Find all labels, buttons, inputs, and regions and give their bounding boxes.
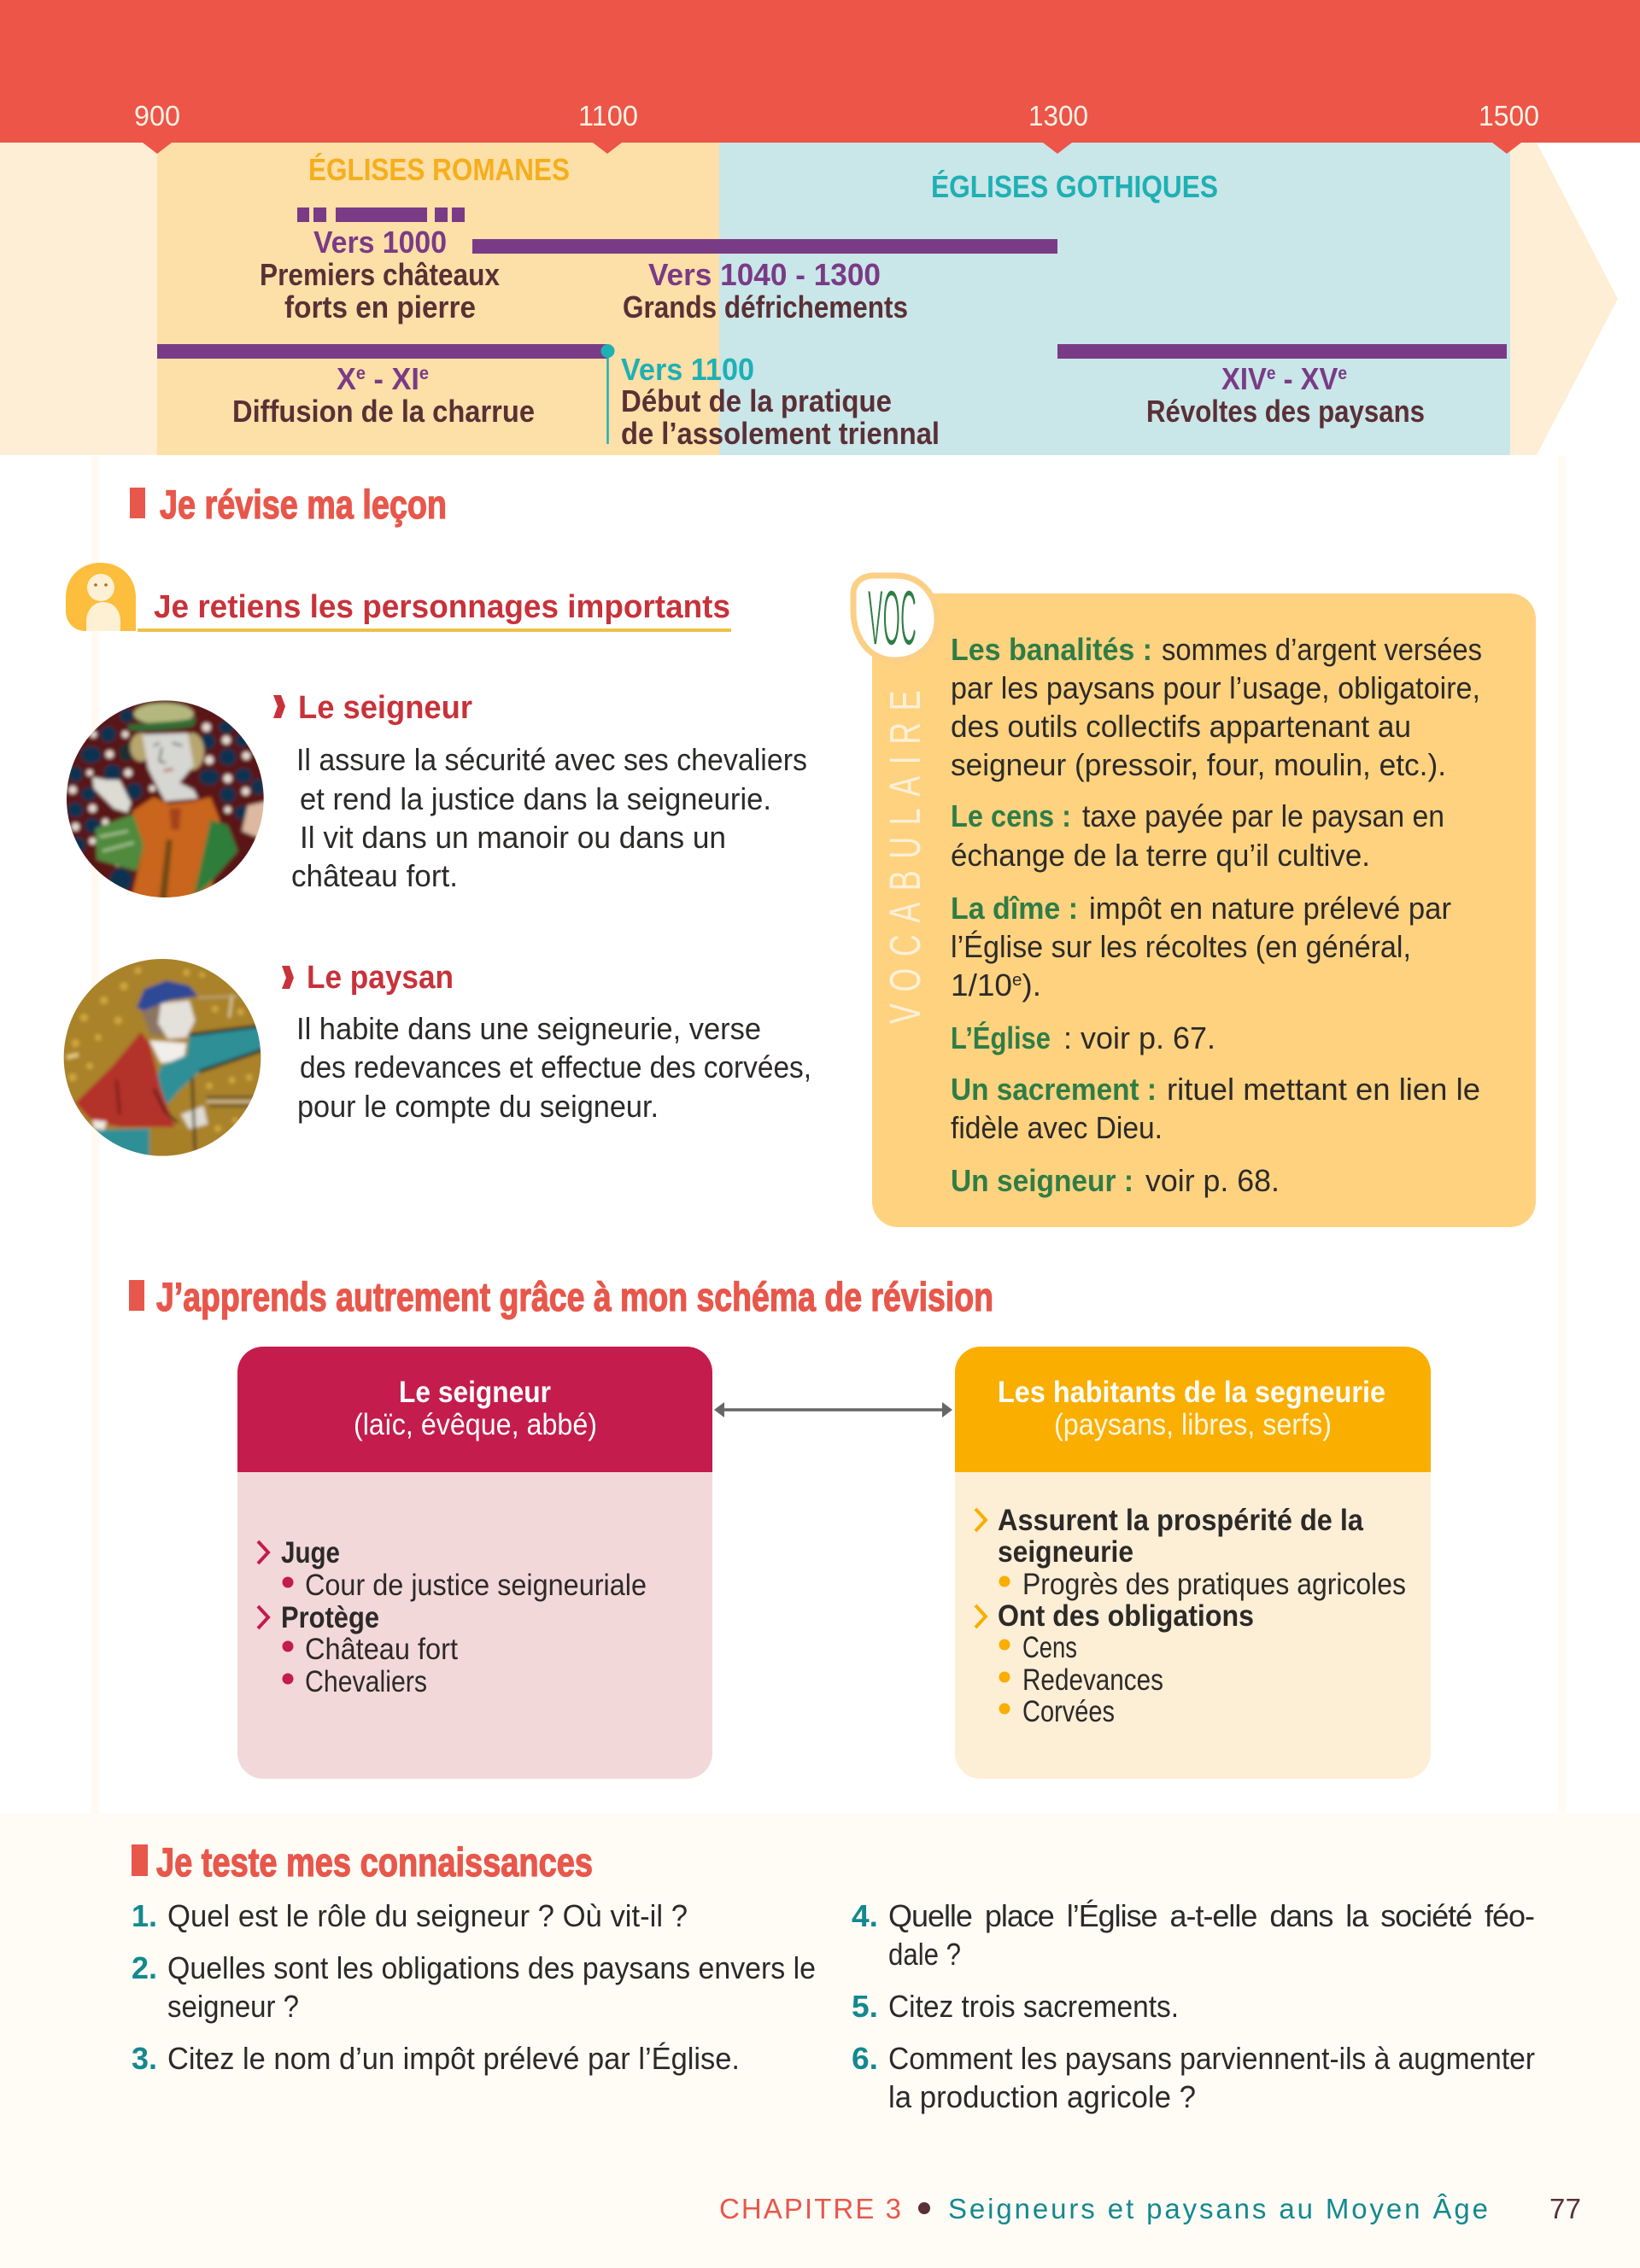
- list: Redevances: [1022, 1663, 1163, 1697]
- heading: schéma de révision: J’apprends autrement grâce à mon schéma de révision: [156, 1274, 993, 1319]
- icon: character: [66, 563, 136, 631]
- portrait: le paysan: [63, 959, 261, 1156]
- timeline years: 1100: [578, 100, 638, 132]
- question 4: Quelle place l’Église a-t-elle dans la société féo-: [888, 1898, 1535, 1933]
- subheading: je retiens les personnages importants: Je retiens les personnages importants: [154, 589, 730, 625]
- panel: vocabulaire: VOC: [868, 575, 917, 662]
- definition: un sacrement: Un sacrement :: [951, 1072, 1157, 1107]
- panel: le seigneur schema box: [237, 1347, 712, 1779]
- list: seigneurie: [998, 1535, 1133, 1569]
- vertical label: vocabulaire: VOCABULAIRE: [882, 690, 930, 1024]
- header text: Les habitants de la segneurie: [998, 1376, 1385, 1409]
- definition: la dîme: La dîme :: [951, 891, 1078, 926]
- question 4: 4.: [852, 1898, 878, 1933]
- text: le seigneur: Il assure la sécurité avec ses chevaliers: [296, 742, 807, 777]
- event: vers 1100: [621, 352, 940, 451]
- timeline years: 1500: [1479, 100, 1539, 132]
- box body: [237, 1470, 712, 1779]
- timeline years: 900: [134, 100, 180, 132]
- event: grands défrichements: [623, 257, 908, 324]
- list: [975, 1504, 1406, 1728]
- event: vers 1100: Vers 1100: [621, 352, 754, 387]
- bar: révoltes des paysans: [1057, 344, 1507, 359]
- dashed bar: vers 1000: [297, 208, 465, 222]
- marker: vers 1100: [601, 344, 615, 444]
- panel: je teste mes connaissances: [0, 1814, 1640, 2268]
- question 2: seigneur ?: [167, 1989, 299, 2024]
- definition: les banalités: Les banalités :: [951, 632, 1152, 667]
- footer: chapter line: 77: [1549, 2193, 1581, 2224]
- bar: diffusion de la charrue: [157, 344, 607, 359]
- question 6: 6.: [852, 2041, 878, 2076]
- text: le paysan: des redevances et effectue des corvées,: [300, 1049, 811, 1084]
- heading: Je teste mes connaissances: [156, 1839, 593, 1885]
- question 4: [852, 1898, 1535, 1972]
- timeline years: 1300: [1028, 100, 1088, 132]
- definition: le cens: Le cens :: [951, 798, 1071, 833]
- definition: l'église: [951, 1020, 1215, 1055]
- event: vers 1000: [260, 225, 500, 324]
- definition: la dîme: [951, 891, 1451, 1002]
- event: révoltes des paysans: XIV: [1221, 361, 1271, 396]
- definition: le cens: taxe payée par le paysan en: [1082, 798, 1444, 833]
- definition: les banalités: des outils collectifs appartenant au: [951, 709, 1411, 744]
- text: le paysan: Il habite dans une seigneurie, verse: [296, 1011, 761, 1046]
- list: Corvées: [1022, 1695, 1115, 1728]
- definition: la dîme: 1/10: [951, 967, 1010, 1002]
- definition: la dîme: ).: [1022, 967, 1041, 1002]
- event: vers 1000: forts en pierre: [284, 289, 476, 324]
- list: Château fort: [305, 1633, 458, 1666]
- list: Juge: [281, 1536, 340, 1569]
- text: le paysan: [282, 960, 811, 1124]
- footer: chapter line: [719, 2193, 1581, 2224]
- heading: églises gothiques: ÉGLISES GOTHIQUES: [931, 169, 1218, 204]
- event: grands défrichements: Vers 1040 - 1300: [648, 257, 881, 292]
- text: le seigneur: [273, 690, 807, 893]
- question 2: 2.: [132, 1950, 157, 1985]
- list: Ont des obligations: [998, 1599, 1254, 1633]
- event: diffusion de la charrue: Diffusion de la charrue: [232, 394, 535, 429]
- event: diffusion de la charrue: [232, 361, 535, 429]
- question 1: 1.: [132, 1898, 157, 1933]
- question 5: 5.: [852, 1989, 878, 2024]
- question 6: Comment les paysans parviennent-ils à augmenter: [888, 2041, 1535, 2076]
- box header: [237, 1347, 712, 1472]
- definition: un sacrement: [951, 1072, 1480, 1145]
- definition: les banalités: sommes d’argent versées: [1162, 632, 1482, 667]
- list: Protège: [281, 1601, 379, 1634]
- question 3: Citez le nom d’un impôt prélevé par l’Église.: [167, 2041, 740, 2076]
- text: le seigneur: et rend la justice dans la seigneurie.: [300, 781, 771, 816]
- question 2: [132, 1950, 816, 2024]
- text: le paysan: pour le compte du seigneur.: [297, 1089, 659, 1124]
- event: révoltes des paysans: e: [1338, 364, 1347, 383]
- definition: le cens: échange de la terre qu’il cultive.: [951, 838, 1370, 873]
- list: Chevaliers: [305, 1665, 427, 1698]
- definition: les banalités: seigneur (pressoir, four, moulin, etc.).: [951, 747, 1446, 782]
- event: vers 1000: Premiers châteaux: [260, 257, 500, 292]
- portrait: le seigneur: [67, 700, 264, 897]
- definition: les banalités: par les paysans pour l’usage, obligatoire,: [951, 670, 1480, 705]
- panel: les habitants schema box: [955, 1347, 1431, 1779]
- timeline arrow background: [0, 143, 1618, 455]
- event: vers 1100: Début de la pratique: [621, 383, 892, 418]
- bar: grands défrichements: [472, 239, 1057, 254]
- header text: [354, 1376, 597, 1441]
- question 6: [852, 2041, 1535, 2114]
- event: révoltes des paysans: - XV: [1275, 361, 1338, 396]
- definition: la dîme: e: [1012, 971, 1022, 990]
- panel background: [0, 1814, 1640, 2268]
- arrow: double-headed link: [714, 1402, 952, 1418]
- question 1: Quel est le rôle du seigneur ? Où vit-il ?: [167, 1898, 688, 1933]
- definition: la dîme: l’Église sur les récoltes (en général,: [951, 929, 1411, 964]
- list: [258, 1536, 647, 1698]
- definition: l'église: : voir p. 67.: [1063, 1020, 1215, 1055]
- definition: un seigneur: Un seigneur :: [951, 1163, 1133, 1198]
- list: Progrès des pratiques agricoles: [1022, 1568, 1406, 1601]
- definition: un seigneur: [951, 1163, 1280, 1198]
- panel: vocabulaire: [853, 575, 1536, 1227]
- heading: églises romanes: ÉGLISES ROMANES: [308, 152, 570, 187]
- header text: Le seigneur: [399, 1376, 551, 1409]
- question 3: 3.: [132, 2041, 157, 2076]
- event: révoltes des paysans: [1146, 361, 1425, 429]
- question 6: la production agricole ?: [888, 2079, 1196, 2114]
- text: le seigneur: Il vit dans un manoir ou dans un: [300, 820, 726, 855]
- footer: chapter line: CHAPITRE 3: [719, 2193, 901, 2224]
- definition: les banalités: [951, 632, 1482, 782]
- header text: (paysans, libres, serfs): [1054, 1408, 1332, 1441]
- panel: timeline: [0, 0, 1640, 455]
- header text: [998, 1376, 1385, 1441]
- question 2: Quelles sont les obligations des paysans envers le: [167, 1950, 816, 1985]
- definition: un seigneur: voir p. 68.: [1145, 1163, 1280, 1198]
- period: romanes background: [157, 143, 719, 455]
- event: révoltes des paysans: Révoltes des paysans: [1146, 394, 1425, 429]
- question 4: dale ?: [888, 1937, 961, 1972]
- timeline tick marks: [143, 143, 1521, 154]
- box header: [955, 1347, 1431, 1472]
- header text: (laïc, évêque, abbé): [354, 1408, 597, 1441]
- definition: un sacrement: rituel mettant en lien le: [1167, 1072, 1480, 1107]
- list: Assurent la prospérité de la: [998, 1504, 1363, 1537]
- event: diffusion de la charrue: e: [356, 364, 366, 383]
- period: gothiques background: [719, 143, 1510, 455]
- event: vers 1000: Vers 1000: [313, 225, 447, 260]
- red header band: [0, 0, 1640, 143]
- timeline years: [134, 100, 1539, 132]
- panel: personnages importants: [56, 563, 811, 1166]
- definition: le cens: [951, 798, 1444, 873]
- event: diffusion de la charrue: X: [337, 361, 357, 396]
- vocabulary background: [872, 593, 1536, 1227]
- box body: [955, 1470, 1431, 1779]
- list: Cens: [1022, 1631, 1077, 1664]
- text: le seigneur: château fort.: [291, 858, 458, 893]
- event: grands défrichements: Grands défrichements: [623, 289, 908, 324]
- event: diffusion de la charrue: e: [419, 364, 429, 383]
- heading: je révise ma leçon: Je révise ma leçon: [160, 482, 447, 527]
- event: diffusion de la charrue: - XI: [366, 361, 419, 396]
- list: Cour de justice seigneuriale: [305, 1569, 647, 1602]
- event: révoltes des paysans: e: [1267, 364, 1275, 383]
- text: le seigneur: Le seigneur: [298, 690, 472, 726]
- definition: l'église: L’Église: [951, 1020, 1051, 1055]
- event: vers 1100: de l’assolement triennal: [621, 416, 940, 451]
- badge: voc: [853, 575, 937, 662]
- footer: chapter line: Seigneurs et paysans au Moyen Âge: [948, 2193, 1488, 2224]
- definition: la dîme: impôt en nature prélevé par: [1089, 891, 1451, 926]
- definition: un sacrement: fidèle avec Dieu.: [951, 1110, 1163, 1145]
- question 5: Citez trois sacrements.: [888, 1989, 1179, 2024]
- text: le paysan: Le paysan: [307, 960, 454, 996]
